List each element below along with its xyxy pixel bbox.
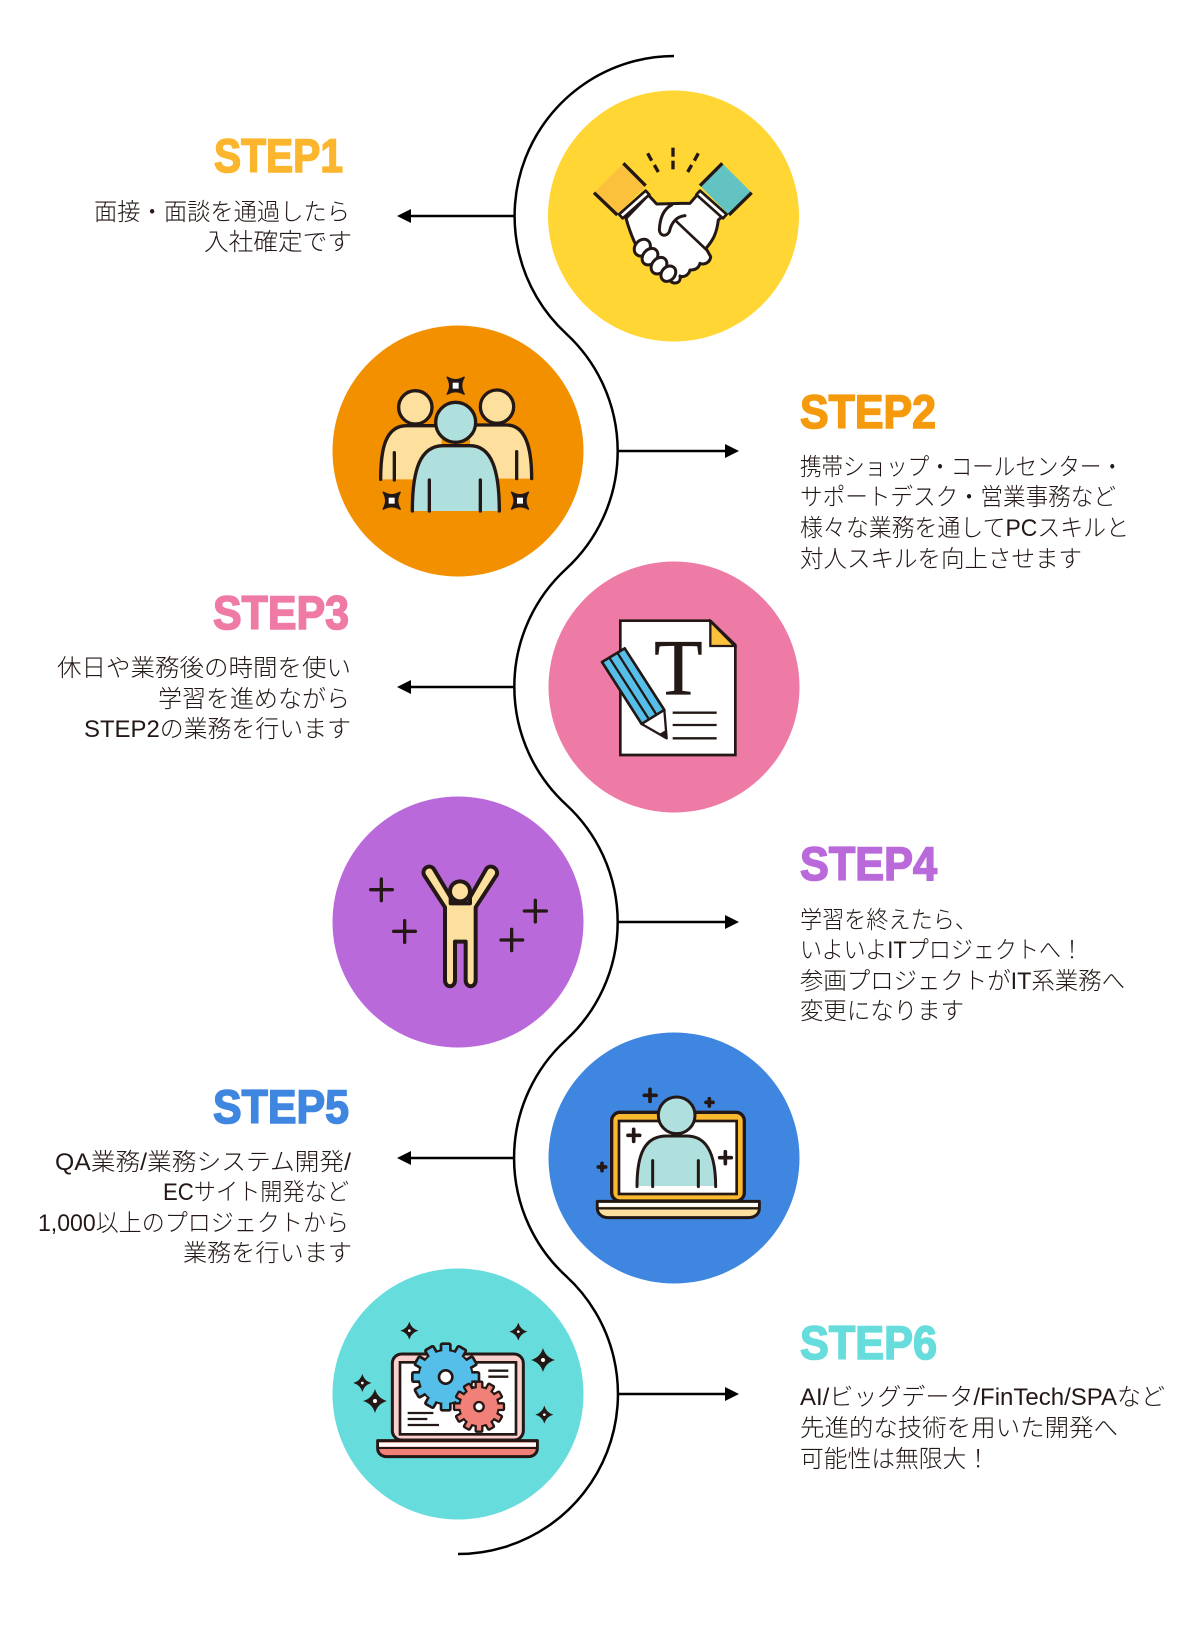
- text block: step 1: 入社確定です: [204, 229, 352, 256]
- arrow: step 2: [618, 444, 739, 458]
- text block: step 5: 1,000以上のプロジェクトから: [38, 1210, 349, 1237]
- panel: step 4: [332, 796, 1125, 1048]
- text block: step 3: 学習を進めながら: [158, 686, 350, 713]
- arrow: step 6: [618, 1387, 739, 1401]
- text block: step 6: 先進的な技術を用いた開発へ: [800, 1415, 1118, 1442]
- heading: step 2: STEP2: [800, 385, 936, 438]
- panel: step 5: [38, 1032, 800, 1284]
- heading: step 1: STEP1: [214, 129, 343, 182]
- text block: step 5: ECサイト開発など: [163, 1179, 349, 1206]
- panel: step 1: [94, 90, 799, 342]
- text block: step 2: 対人スキルを向上させます: [800, 546, 1082, 573]
- circle: step 6: [332, 1268, 584, 1520]
- panel: step 2: [332, 326, 1129, 576]
- heading: step 5: STEP5: [213, 1080, 349, 1133]
- text block: step 5: 業務を行います: [183, 1240, 352, 1267]
- icon: person with raised arms: [371, 867, 546, 986]
- text block: step 1: 面接・面談を通過したら: [94, 199, 350, 226]
- text block: step 4: [800, 907, 1125, 1025]
- icon: team: [381, 377, 532, 511]
- heading: step 4: STEP4: [800, 837, 937, 890]
- icon: handshake: [594, 148, 752, 284]
- text block: step 6: AI/ビッグデータ/FinTech/SPAなど: [800, 1384, 1165, 1411]
- winding timeline curve: [458, 56, 674, 1554]
- circle: step 4: [332, 796, 584, 1048]
- text block: step 2: 携帯ショップ・コールセンター・: [800, 454, 1123, 481]
- text block: step 1: [94, 199, 352, 256]
- text block: step 3: 休日や業務後の時間を使い: [57, 655, 351, 682]
- circle: step 3: [548, 562, 800, 812]
- text block: step 2: [800, 454, 1129, 573]
- text block: step 3: [57, 655, 351, 743]
- circle: step 2: [332, 326, 584, 576]
- text block: step 5: [38, 1149, 352, 1267]
- heading: step 3: STEP3: [213, 586, 349, 639]
- icon: document and pencil: [602, 621, 735, 755]
- icon: laptop with gears: [353, 1322, 555, 1457]
- arrow: step 4: [618, 915, 739, 929]
- heading: step 6: STEP6: [800, 1316, 937, 1369]
- panel: step 6: [332, 1268, 1165, 1520]
- text block: step 6: [800, 1384, 1165, 1473]
- icon: document and pencil: T: [654, 624, 703, 712]
- icon: person on laptop: [597, 1089, 759, 1218]
- arrow: step 5: [397, 1151, 514, 1165]
- panel: step 3: [57, 562, 800, 812]
- circle: step 5: [548, 1032, 800, 1284]
- text block: step 4: 変更になります: [800, 998, 964, 1025]
- text block: step 6: 可能性は無限大！: [800, 1446, 990, 1473]
- circle: step 1: [548, 90, 799, 342]
- text block: step 2: サポートデスク・営業事務など: [800, 484, 1116, 511]
- text block: step 3: STEP2の業務を行います: [84, 716, 351, 743]
- text block: step 5: QA業務/業務システム開発/: [55, 1149, 351, 1176]
- text block: step 4: 参画プロジェクトがIT系業務へ: [800, 968, 1125, 995]
- arrow: step 1: [397, 209, 514, 223]
- text block: step 4: 学習を終えたら、: [800, 907, 977, 934]
- text block: step 4: いよいよITプロジェクトへ！: [800, 937, 1083, 964]
- text block: step 2: 様々な業務を通してPCスキルと: [800, 515, 1129, 542]
- arrow: step 3: [397, 680, 514, 694]
